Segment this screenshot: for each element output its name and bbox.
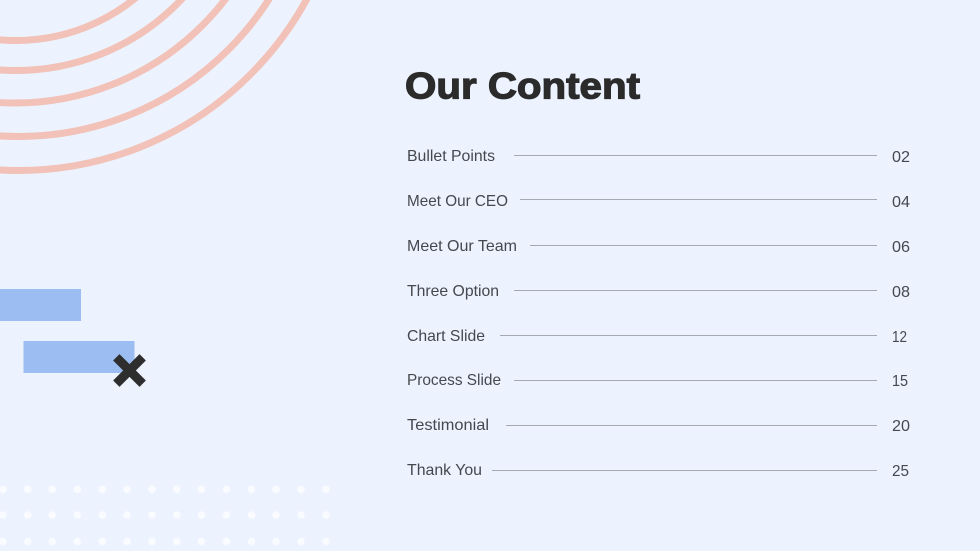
row: Meet Our Team: Meet Our Team — [407, 238, 517, 255]
row: Chart Slide: Chart Slide — [407, 328, 485, 345]
row: Three Option: 08 — [892, 284, 910, 301]
row: Testimonial: 20 — [892, 418, 910, 435]
row: Testimonial — [407, 417, 910, 435]
row: Bullet Points: Bullet Points — [407, 148, 495, 165]
row: Process Slide: Process Slide — [407, 372, 501, 389]
row: Testimonial: Testimonial — [407, 417, 489, 434]
row: Meet Our CEO — [407, 193, 910, 211]
row: Process Slide — [407, 372, 908, 390]
row: Meet Our CEO: Meet Our CEO — [407, 193, 508, 210]
row: Bullet Points: 02 — [892, 149, 910, 166]
row: Chart Slide — [407, 328, 907, 346]
title: Our Content — [405, 66, 640, 106]
row: Bullet Points — [407, 148, 910, 166]
row: Meet Our CEO: 04 — [892, 194, 910, 211]
row: Meet Our Team — [407, 238, 910, 256]
row: Chart Slide: 12 — [892, 329, 907, 346]
concentric arcs decoration — [0, 0, 346, 170]
dot grid — [0, 486, 330, 545]
blue bar bottom — [24, 341, 134, 373]
row: Thank You — [407, 462, 909, 480]
contents list — [407, 148, 910, 480]
icon: cross — [116, 357, 143, 384]
row: Meet Our Team: 06 — [892, 239, 910, 256]
row: Three Option: Three Option — [407, 283, 499, 300]
blue bar top — [0, 289, 81, 321]
row: Three Option — [407, 283, 910, 301]
row: Process Slide: 15 — [892, 373, 908, 390]
row: Thank You: Thank You — [407, 462, 482, 479]
row: Thank You: 25 — [892, 463, 909, 480]
